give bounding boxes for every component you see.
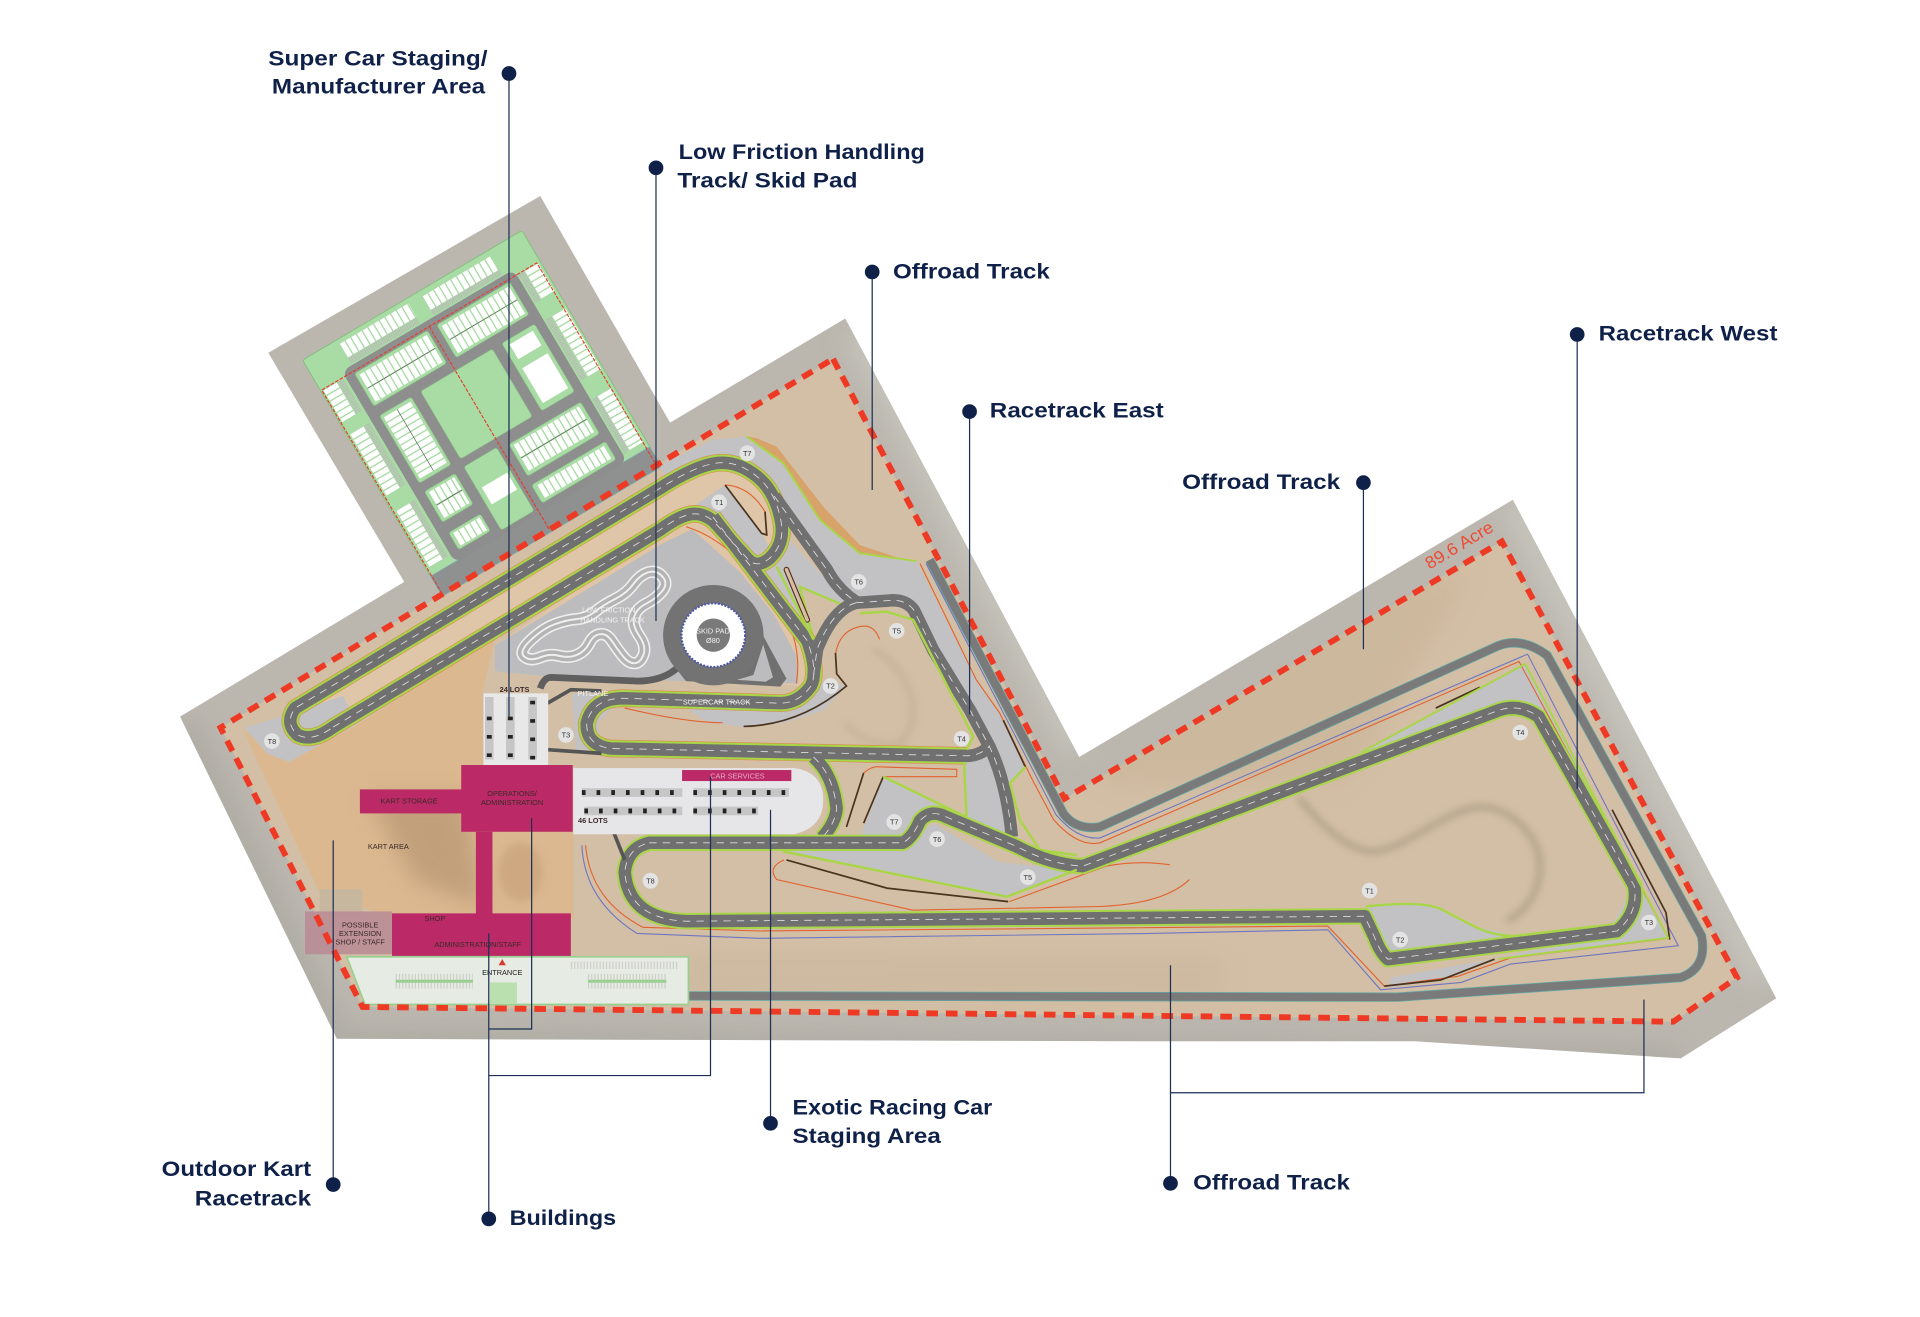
callout: exotic racing car staging: Exotic Racing Car xyxy=(793,1096,993,1120)
peach infield between east straights xyxy=(290,463,782,737)
callout: offroad track south xyxy=(1163,965,1644,1194)
peach strip below T1 road xyxy=(495,517,813,686)
pitlane connector roads xyxy=(548,690,784,860)
turn marker T5 upper xyxy=(889,623,905,639)
24 lots parking xyxy=(484,685,548,765)
acreage label: 89.6 Acre xyxy=(1421,517,1497,573)
buildings: pink blocks: ADMINISTRATION/STAFF xyxy=(434,940,522,949)
callout: outdoor kart racetrack xyxy=(162,840,341,1210)
turn marker T6 lower: T6 xyxy=(933,835,941,844)
possible extension block: SHOP / STAFF xyxy=(335,937,385,946)
turn marker T3 upper xyxy=(558,727,574,743)
low friction handling track and skid pad zone xyxy=(495,529,799,684)
offroad perimeter track xyxy=(688,560,1703,997)
parking: super car staging area xyxy=(303,230,662,596)
track name labels: PITLANE xyxy=(578,689,608,698)
callout: outdoor kart racetrack: Racetrack xyxy=(195,1186,311,1210)
turn marker T3 west: T3 xyxy=(1645,918,1653,927)
turn marker T7 lower xyxy=(886,814,902,830)
turn marker T7 upper: T7 xyxy=(743,449,752,458)
car services bar: CAR SERVICES xyxy=(710,772,765,781)
orange gravel trap at T7 xyxy=(746,436,900,559)
callout: racetrack east: Racetrack East xyxy=(990,399,1164,423)
buildings: pink blocks xyxy=(360,765,573,958)
skid pad circle: SKID PAD xyxy=(696,626,730,635)
callout: low friction handling track: Low Friction Handling xyxy=(679,140,925,164)
callout: low friction handling track xyxy=(649,140,925,621)
callout: offroad track south: Offroad Track xyxy=(1193,1170,1350,1194)
buildings: pink blocks: SHOP xyxy=(424,914,445,923)
tan island triangle xyxy=(800,587,846,639)
turn marker T6 upper xyxy=(851,574,867,590)
turn marker T2 west: T2 xyxy=(1396,935,1404,944)
racetrack east loop xyxy=(290,437,1077,855)
callout: racetrack east xyxy=(962,399,1164,714)
kart area label: KART AREA xyxy=(368,842,409,851)
turn marker T8 lower xyxy=(643,873,658,889)
turn marker T2 upper: T2 xyxy=(826,682,835,691)
low friction handling track and skid pad zone: LOW FRICTION xyxy=(582,606,635,615)
turn marker T1 upper: T1 xyxy=(715,498,723,507)
racetrack west loop xyxy=(625,664,1668,959)
callout: low friction handling track: Track/ Skid Pad xyxy=(677,168,857,192)
turn marker T3 upper: T3 xyxy=(562,731,570,740)
callout: exotic racing car staging xyxy=(763,810,993,1148)
site plan infographic xyxy=(162,50,1778,1230)
turn marker T4 west xyxy=(1512,725,1528,740)
turn marker T6 upper: T6 xyxy=(854,578,863,587)
turn marker T5 upper: T5 xyxy=(892,627,901,636)
callout: buildings xyxy=(481,777,710,1230)
turn marker T2 west xyxy=(1392,932,1408,947)
turn marker T1 upper xyxy=(711,494,727,510)
callout: outdoor kart racetrack: Outdoor Kart xyxy=(162,1157,311,1181)
callout: offroad track mid: Offroad Track xyxy=(1182,470,1340,494)
red dashed site boundary xyxy=(220,359,1737,1022)
turn marker T1 west: T1 xyxy=(1365,886,1374,895)
track name labels xyxy=(578,689,750,706)
dark barrier walls xyxy=(725,485,1670,986)
callout: super car staging: Manufacturer Area xyxy=(272,75,486,99)
turn marker T3 west xyxy=(1641,915,1657,930)
possible extension block: EXTENSION xyxy=(339,929,381,938)
turn marker T4 upper: T4 xyxy=(957,734,966,743)
entrance parking lot xyxy=(347,957,688,1005)
callout: offroad track north: Offroad Track xyxy=(893,260,1050,284)
turn marker T7 lower: T7 xyxy=(890,818,899,827)
turn marker T8 upper xyxy=(264,733,280,749)
track name labels: SUPERCAR TRACK xyxy=(683,697,750,706)
callout: buildings: Buildings xyxy=(510,1206,616,1230)
exotic racing car staging area: 46 LOTS xyxy=(578,816,608,825)
runoff areas xyxy=(245,437,1668,987)
turn marker T4 upper xyxy=(954,731,969,747)
callout: offroad track mid xyxy=(1182,470,1371,649)
buildings: pink blocks: OPERATIONS/ xyxy=(487,789,538,798)
kart area sand xyxy=(244,637,573,919)
turn marker T1 west xyxy=(1362,883,1377,898)
turn marker T2 upper xyxy=(823,678,838,694)
turn marker T5 lower: T5 xyxy=(1023,873,1032,882)
turn marker T6 lower xyxy=(929,831,945,847)
buildings: pink blocks: ADMINISTRATION xyxy=(481,798,543,807)
turn marker T4 west: T4 xyxy=(1516,728,1525,737)
skid pad circle: Ø80 xyxy=(706,636,720,645)
callout: racetrack west: Racetrack West xyxy=(1599,322,1777,346)
turn marker T8 lower: T8 xyxy=(646,876,655,885)
skid pad circle xyxy=(540,585,786,688)
entrance parking lot: ENTRANCE xyxy=(482,968,523,977)
callout: exotic racing car staging: Staging Area xyxy=(793,1124,942,1148)
possible extension block: POSSIBLE xyxy=(342,920,378,929)
turn marker T5 lower xyxy=(1020,869,1036,885)
turn marker T8 upper: T8 xyxy=(268,737,276,746)
car services bar xyxy=(682,770,791,781)
aerial site ground xyxy=(180,196,1776,1061)
callout: offroad track north xyxy=(865,260,1050,490)
callout: super car staging xyxy=(268,47,516,717)
low friction handling track and skid pad zone: HANDLING TRACK xyxy=(580,615,645,624)
callout: super car staging: Super Car Staging/ xyxy=(268,47,488,71)
thin survey and barrier lines xyxy=(582,485,1678,990)
possible extension block xyxy=(305,911,392,954)
pit island xyxy=(786,570,807,620)
buildings: pink blocks: KART STORAGE xyxy=(381,797,438,806)
turn marker T7 upper xyxy=(739,445,755,461)
sand terrain inside boundary xyxy=(220,359,1737,1022)
exotic racing car staging area xyxy=(573,768,823,834)
callout: racetrack west xyxy=(1570,322,1777,789)
24 lots parking: 24 LOTS xyxy=(500,685,529,694)
